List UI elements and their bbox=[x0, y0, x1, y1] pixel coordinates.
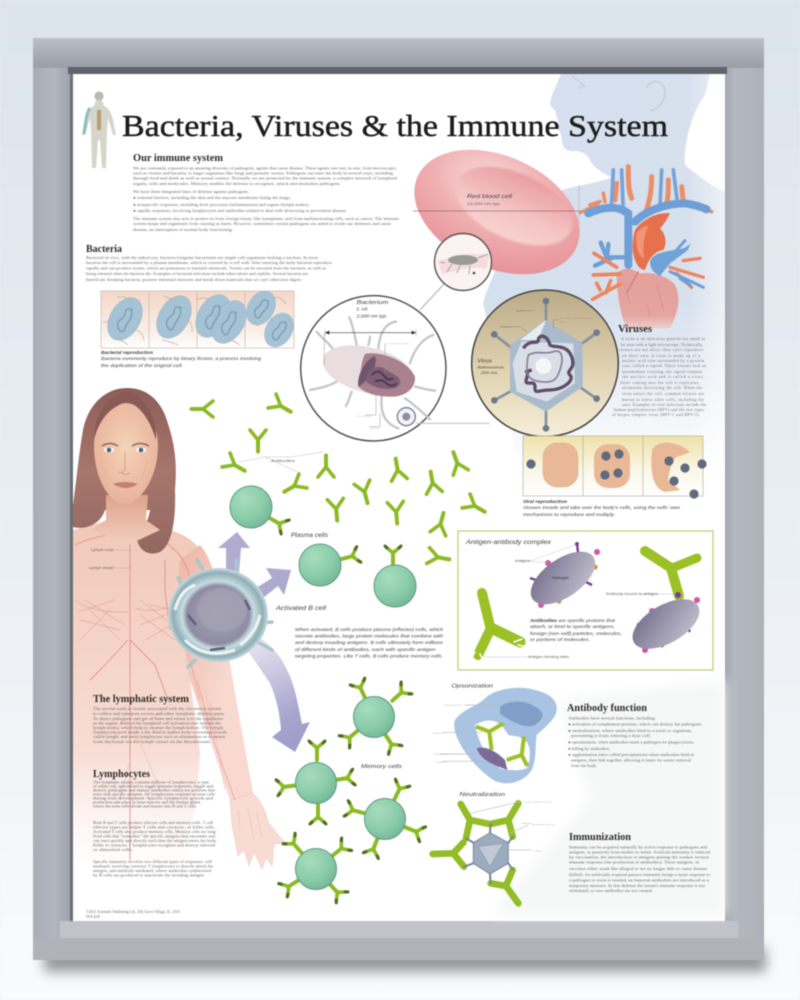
woman head and hair bbox=[73, 388, 176, 554]
text block: lymphatic system: To detect pathogens and get of them and return it to the capillaries bbox=[93, 717, 224, 721]
text block: lymphocytes: lived cells that "remember" the specific antigens they encounter and bbox=[93, 834, 215, 838]
free antibodies bbox=[192, 394, 489, 567]
neutralization diagram: IgG antibodies bbox=[524, 801, 553, 804]
text block: bacteria: being released when the bacteria die. Examples of bacterial infections include tuberculosis and syphilis. Several bacteria are bbox=[86, 272, 308, 276]
text block: viruses: known to infect other cells, including the bbox=[622, 398, 704, 403]
bacterium diagram: Bacterium bbox=[357, 300, 389, 306]
text block: lymphocytes: mediated, involving cytotoxic T lymphocytes to directly attack the bbox=[93, 864, 213, 870]
magnifier: bacterium on red cell bbox=[420, 234, 492, 310]
text block: our immune system: organs, cells and molecules. Memory enables the defense to recognize, attack and neutralize pathogens. bbox=[133, 182, 341, 187]
antigen-antibody complex box: Antibodies are specific proteins that bbox=[529, 618, 616, 624]
text block: bacteria: rapidly and can produce toxins, which are poisonous or harmful chemicals. Toxins can be secreted from the bacteria, as well as bbox=[86, 266, 327, 272]
aorta bbox=[633, 213, 670, 270]
text block: lymphatic system: called lymph, and early lymphocyte such as elimination on to return bbox=[93, 735, 225, 740]
text block: lymphocytes: can react quickly and directly each time the antigen enters the body. bbox=[93, 839, 217, 843]
antigen-antibody complex box: attach, or bind to specific antigens, bbox=[530, 624, 615, 630]
label: plasma cells: Plasma cells bbox=[291, 533, 328, 539]
text block: viruses bbox=[612, 323, 706, 417]
virus diagram: 200 nm bbox=[479, 371, 497, 375]
text block: immunization: immune response (the production of antibodies). These antigens, in bbox=[569, 860, 699, 866]
text block: lymphocytes: where the stem cells divide and mature into B and T cells. bbox=[93, 804, 197, 808]
virus diagram: Capsid bbox=[501, 326, 512, 328]
antigen-antibody complex box: Antigens bbox=[515, 559, 530, 563]
icon: body figure bbox=[82, 91, 116, 168]
text block: immunization: antigens, or passively from mother to infant. Artificial immunity is induced bbox=[569, 850, 710, 856]
antigen-antibody complex box: Antibody bound to antigen bbox=[606, 592, 658, 596]
text block: lymphatic system: lymphocyte pool inside a the fluid to bathes body screening vessels bbox=[93, 730, 228, 734]
text block: our immune system: Our immune system bbox=[133, 152, 223, 164]
text block: antibody function: Antibody function bbox=[567, 702, 647, 714]
text block: B cell activation bbox=[295, 627, 444, 660]
label: activated B cell: Activated B cell bbox=[275, 606, 327, 612]
antigen-antibody complex box: Pathogen bbox=[552, 576, 569, 580]
text block: lymphocytes: antigen, and antibody-mediated, where antibodies synthesized bbox=[93, 869, 211, 874]
text block: lymphocytes: Activated T cells also produce memory cells. Memory cells are long- bbox=[93, 830, 218, 834]
text block: antibody function: Antibodies have several functions, including: bbox=[568, 716, 656, 722]
lymph labels bbox=[89, 548, 133, 570]
text block: viruses: After coming into the cell it replicates, bbox=[620, 381, 700, 386]
text block: antibody function: ● killing by antibodies; bbox=[568, 747, 610, 751]
text block: our immune system: The immune system also acts to protect us from foreign tissue, like transplants, and from malfunctioning cells, such as cancer. The immune bbox=[133, 217, 399, 222]
activated B cell bbox=[168, 560, 272, 667]
text block: B cell activation: targeting properties. Like T cells, B cells produce memory cells. bbox=[295, 654, 443, 660]
credits: 9110 bbox=[86, 915, 100, 919]
body silhouette with head and neck bbox=[470, 74, 725, 472]
bacterium diagram: Pilus bbox=[370, 427, 382, 429]
text block: lymphocytes: Specific immunity involves two different types of responses: cell- bbox=[93, 860, 214, 864]
virus diagram: Virus bbox=[477, 358, 492, 364]
lymph labels: Lymph node bbox=[91, 548, 114, 552]
text block: lymphocytes: of white cell, specialized to toggle immune responses, toggle and bbox=[93, 784, 213, 790]
text block: immunization: a pathogen or toxin is needed, an humoral antibodies are introduced as a bbox=[569, 878, 709, 884]
text block: immunization bbox=[569, 831, 710, 894]
text block: B cell activation: secrete antibodies, large protein molecules that combine with bbox=[295, 634, 443, 640]
text block: viruses: be seen with a light microscope. Technically, bbox=[621, 343, 703, 348]
viral reproduction panels bbox=[523, 436, 707, 499]
bacterium diagram bbox=[301, 296, 490, 441]
text block: lymphocytes: by B cells are produced to inactivate the invading antigen. bbox=[93, 874, 205, 878]
text block: viruses: A virus is an infectious particle too small to bbox=[621, 337, 705, 341]
text block: viruses: the nucleic acid and is called a virus. bbox=[622, 375, 704, 379]
text block: antibody function: ● neutralization, where antibodies bind to a toxin or organism, bbox=[568, 729, 692, 734]
text block: B cell activation: and destroy invading antigens. B cells ultimately form millions bbox=[295, 640, 444, 646]
text block: viruses: of herpes simplex virus (HPV-1 and HPV-2). bbox=[612, 413, 700, 417]
text block: viruses: virus enters the cell, common viruses are bbox=[622, 392, 704, 397]
red blood cell bbox=[395, 125, 599, 299]
text block: lymphatic system: The second outfit is closely associated with the circulatory system bbox=[93, 707, 221, 711]
text block: our immune system: through food and drink as well as sexual contact. Normally we are protected by the immune system, a complex network of lymphoid bbox=[133, 176, 397, 182]
opsonization diagram: Opsonization bbox=[451, 683, 493, 689]
text block: our immune system: disease, an interruption of normal body functioning. bbox=[133, 228, 233, 233]
text block: viruses: ultimately destroying the cell. When the bbox=[622, 386, 702, 390]
free antibodies: Antibodies bbox=[271, 459, 295, 463]
text block: B cell activation: of different kinds of antibodies, each with specific antigen- bbox=[295, 647, 437, 653]
text block: lymphatic system: as the organs. Both of the lymphoid cell activation sites include the bbox=[93, 722, 221, 726]
text block: antibody function: ● agglutination (also called precipitation) when antibodies bind at bbox=[568, 753, 695, 757]
text block: lymphatic system bbox=[93, 693, 228, 744]
text block: viruses: on their own. A virus is made up of a bbox=[622, 354, 700, 358]
neutralization diagram: Binding sites bbox=[532, 823, 556, 826]
antigen-antibody complex box: or portions of molecules. bbox=[530, 637, 590, 643]
opsonization diagram: Phagocyte bbox=[444, 704, 464, 707]
text block: immunization: stimulated, so new antibodies are not created. bbox=[569, 889, 653, 894]
text block: antibody function: antigens, then link together, allowing it faster for easier removal bbox=[571, 758, 691, 764]
opsonization diagram bbox=[432, 683, 557, 783]
caption: bacterial reproduction: Bacteria commonly reproduce by binary fission, a process involving bbox=[101, 356, 261, 362]
antigen-antibody complex box bbox=[458, 531, 713, 670]
text block: viruses: human papillomavirus (HPV) and the two types bbox=[614, 408, 704, 412]
text block: our immune system: such as viruses and bacteria, to larger organisms like fungi and parasitic worms. Pathogens can enter the body in several ways, including bbox=[133, 172, 393, 176]
credits bbox=[86, 909, 180, 919]
text block: viruses: viruses are not alive; they can't reproduce bbox=[619, 348, 703, 352]
neutralization diagram: Neutralization bbox=[459, 792, 505, 798]
heart muscle bbox=[617, 269, 678, 328]
text block: our immune system: We are constantly exposed to an amazing diversity of pathogens, agents that cause disease. These agents can vary in size, from microscopic, bbox=[133, 166, 397, 172]
caption: viral reproduction: Viruses invade and take over the body's cells, using the cells' own bbox=[523, 505, 680, 511]
text block: viruses: intermediate covering, the capsid contains bbox=[622, 370, 702, 375]
text block: viruses: ones. Examples of viral infections include the bbox=[622, 403, 706, 407]
neutralization diagram bbox=[433, 792, 556, 903]
left lung branches bbox=[595, 243, 625, 266]
opsonization diagram: Antibody bbox=[432, 731, 447, 734]
text block: lymphocytes: or abnormal cells. bbox=[93, 848, 133, 852]
bacterial reproduction panels bbox=[101, 286, 299, 352]
virus diagram: Adenovirus bbox=[476, 365, 504, 369]
neutralization diagram: Virus bbox=[533, 850, 543, 853]
virus diagram: Fiber bbox=[517, 309, 527, 312]
virus diagram bbox=[472, 290, 618, 437]
text block: lymphatic system: The lymphatic system bbox=[93, 693, 189, 705]
text block: bacteria: Bacterial in-vivo, with the naked eye, bacteria (singular bacterium) are single-cell organisms lacking a nucleus. In most bbox=[86, 256, 319, 261]
text block: our immune system: ● external barriers, including the skin and the mucous membrane lining the lungs; bbox=[133, 196, 291, 201]
text block: our immune system bbox=[133, 152, 399, 233]
memory cells bbox=[276, 678, 426, 903]
text block: antibody function bbox=[567, 702, 702, 768]
text block: viruses: Viruses bbox=[618, 323, 653, 335]
opsonization diagram: Bacteria bbox=[434, 753, 448, 756]
poster sheet bbox=[73, 74, 725, 921]
text block: immunization: Immunization bbox=[569, 831, 631, 843]
caption: viral reproduction: Viral reproduction bbox=[523, 499, 567, 505]
text block: lymphocytes: destroy pathogens and mature antibodies which are proteins that bbox=[93, 788, 216, 792]
text block: our immune system: ● nonspecific responses, including fever processes (inflammation) and organs (lymph nodes); bbox=[133, 203, 309, 208]
arrows from activated B cell bbox=[218, 532, 310, 752]
virus diagram: Double-stranded bbox=[559, 316, 593, 319]
caption: viral reproduction bbox=[523, 499, 680, 518]
text block: bacteria: bacteria the cell is surrounded by a plasma membrane, which is covered by a cell wall. After entering the body bacteria reproduce bbox=[86, 261, 332, 266]
text block: immunization: vaccines either weak like alleged or are no longer able to cause disease bbox=[569, 867, 707, 871]
antigen-antibody complex box: Antigen-antibody complex bbox=[465, 539, 552, 546]
text block: our immune system: We have three integrated lines of defense against pathogens: bbox=[133, 190, 249, 194]
text block: lymphocytes: during fetal development. Specific lymphocyte growth and bbox=[93, 796, 213, 800]
title: Bacteria, Viruses & the Immune System bbox=[122, 108, 668, 143]
text block: immunization: Immunity can be acquired naturally by active response to pathogens and bbox=[569, 846, 707, 850]
watermark shapes bbox=[490, 680, 725, 915]
label: memory cells: Memory cells bbox=[361, 764, 402, 770]
antigen-antibody complex box: foreign (non-self) particles, molecules, bbox=[530, 631, 622, 637]
text block: bacteria: Bacteria bbox=[86, 243, 122, 255]
bacterium diagram: E. coli bbox=[357, 307, 368, 312]
text block: B cell activation: When activated, B cells produce plasma (effector) cells, which bbox=[295, 627, 443, 633]
text block: lymphocytes: The lymphatic system contains millions of lymphocytes, a type bbox=[93, 780, 209, 786]
woman torso with lymph vessels bbox=[73, 520, 285, 869]
text block: lymphocytes: Killer or cytotoxic T lymphocytes recognize and destroy infected bbox=[93, 844, 215, 848]
text block: antibody function: from the body. bbox=[571, 764, 597, 768]
text block: immunization: by vaccination, the introduction of antigens putting the weaker version bbox=[569, 856, 709, 860]
text block: lymphatic system: lymph nodes, which help to cleanse the lymph before. The lymph bbox=[93, 726, 223, 731]
caption: bacterial reproduction: the duplication of the original cell. bbox=[101, 363, 183, 369]
heart and blood vessels bbox=[580, 167, 712, 328]
text block: lymphocytes bbox=[93, 768, 218, 878]
antigen-antibody complex box: Antigen-binding sites bbox=[528, 655, 569, 659]
virus diagram: DNA bbox=[559, 320, 569, 323]
red blood cell: Red blood cell bbox=[467, 194, 513, 200]
bacterium diagram: Cell wall bbox=[357, 416, 374, 418]
lymph labels: Lymph vessel bbox=[89, 566, 114, 570]
pulmonary trunk and right branches bbox=[670, 258, 703, 287]
text block: immunization: temporary measure. In this defense the serum's immune response is not bbox=[569, 884, 706, 888]
caption: bacterial reproduction: Bacterial reproduction bbox=[101, 350, 153, 356]
caption: viral reproduction: mechanisms to reproduce and multiply. bbox=[523, 512, 615, 518]
text block: lymphocytes: Lymphocytes bbox=[93, 768, 151, 780]
caption: bacterial reproduction bbox=[101, 350, 261, 369]
credits: ©2011 Scientific Publishing Ltd., Elk Grove Village, IL, USA bbox=[86, 909, 180, 915]
opsonization diagram: Antigen bbox=[434, 760, 447, 763]
text block: lymphocytes: react with specific antigens. All lymphocytes originate as stem cells bbox=[93, 792, 216, 796]
text block: antibody function: preventing it from entering a host cell; bbox=[571, 734, 651, 738]
text block: lymphatic system: from the tissue via the lymph vessel on the bloodstream. bbox=[93, 740, 211, 744]
text block: lymphocytes: production take place in bone marrow and the thymus gland, bbox=[93, 800, 201, 806]
text block: antibody function: ● opsonization, when antibodies mark a pathogen for phagocytosis; bbox=[568, 740, 694, 746]
text block: lymphatic system: to collect and transport excess and other lymphatic defense parts. bbox=[93, 712, 225, 716]
text block: lymphocytes: Both B and T cells produce effector cells and memory cells. T cell bbox=[93, 821, 213, 825]
text block: immunization: (killed). An artificially acquired passive immunity brings a faster response to bbox=[569, 873, 710, 877]
bacterium diagram: 2,000 nm typ. bbox=[355, 313, 387, 318]
text block: bacteria bbox=[86, 243, 332, 283]
text block: our immune system: ● rapidly responses, involving lymphocytes and antibodies related to deal with destroying or prevention disease. bbox=[133, 209, 347, 214]
frame shadow bbox=[44, 948, 766, 972]
text block: our immune system: system keeps and organisms from causing us harm. However, sometimes certain pathogens are aided to evade our defenses and cause bbox=[133, 222, 391, 227]
text block: antibody function: ● activation of complement proteins, which can destroy the pathogens; bbox=[568, 722, 702, 728]
text block: viruses: coat, called a capsid. These viruses lack an bbox=[622, 364, 706, 369]
neck vessels bbox=[615, 167, 683, 213]
bacterium diagram: Circular DNA bbox=[388, 342, 412, 345]
red blood cell: 10,000 nm typ. bbox=[467, 202, 501, 206]
plasma cells bbox=[230, 486, 416, 607]
text block: bacteria: beneficial, breaking bacteria, positive intestinal mixtures and break down materials that we can't otherwise digest. bbox=[86, 278, 302, 283]
text block: viruses: nucleic acid core surrounded by a protein bbox=[622, 359, 704, 363]
text block: lymphocytes: effector types are helper T cells and cytotoxic, or killer cells. bbox=[93, 826, 215, 830]
